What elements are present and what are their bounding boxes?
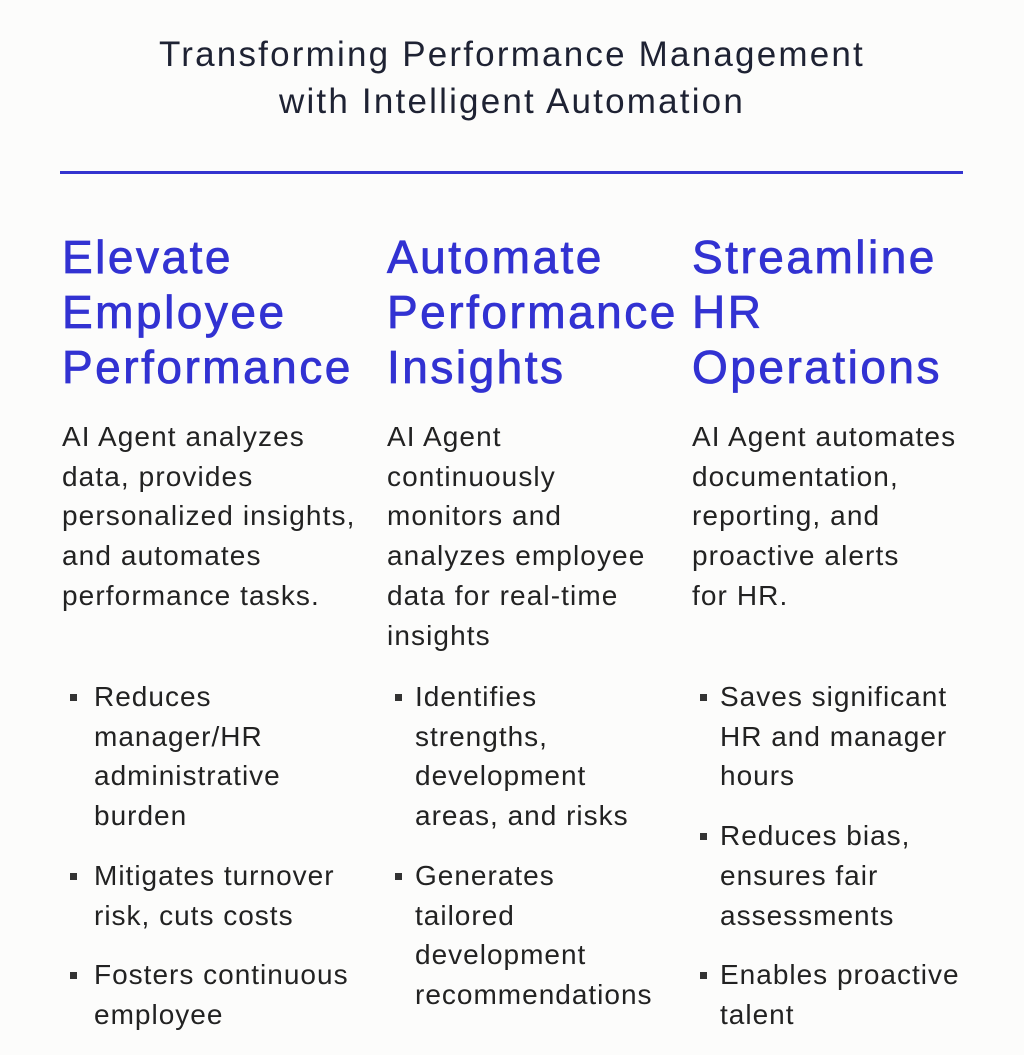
description 3: proactive alerts (692, 540, 899, 571)
bullets 2: development (415, 760, 586, 791)
bullets 2: Generates (415, 860, 555, 891)
bullets 1: administrative (94, 760, 281, 791)
bullets 1: employee (94, 999, 223, 1030)
description 3: documentation, (692, 461, 899, 492)
description 1: personalized insights, (62, 500, 355, 531)
bullets 3: Enables proactive (720, 959, 960, 990)
heading 3: Operations (692, 341, 942, 393)
bullets 2 (395, 681, 653, 1010)
bullets 1: manager/HR (94, 721, 263, 752)
bullets 1: Reduces (94, 681, 212, 712)
heading 2: Performance (387, 286, 678, 338)
bullets 1: risk, cuts costs (94, 900, 294, 931)
bullets 3 (700, 681, 960, 1030)
description 3: for HR. (692, 580, 788, 611)
bullets 2: development (415, 939, 586, 970)
description 2 (387, 421, 645, 651)
bullets 3: HR and manager (720, 721, 947, 752)
heading 1: Performance (62, 341, 353, 393)
description 1: data, provides (62, 461, 253, 492)
heading 2: Automate (387, 231, 604, 283)
description 2: AI Agent (387, 421, 502, 452)
description 2: monitors and (387, 500, 562, 531)
description 1: and automates (62, 540, 262, 571)
description 2: continuously (387, 461, 556, 492)
bullets 2: tailored (415, 900, 515, 931)
description 3: AI Agent automates (692, 421, 956, 452)
bullets 3: assessments (720, 900, 894, 931)
description 3: reporting, and (692, 500, 880, 531)
bullets 3: talent (720, 999, 794, 1030)
bullets 3: ensures fair (720, 860, 878, 891)
bullets 2: areas, and risks (415, 800, 629, 831)
heading 3 (692, 231, 942, 393)
description 1: AI Agent analyzes (62, 421, 305, 452)
title: with Intelligent Automation (279, 82, 745, 121)
column 2 (386, 231, 678, 1010)
description 1 (62, 421, 355, 611)
description 2: analyzes employee (387, 540, 645, 571)
title (159, 35, 865, 121)
column 1 (62, 231, 355, 1030)
description 3 (692, 421, 956, 611)
description 2: data for real-time (387, 580, 618, 611)
column 3 (692, 231, 960, 1030)
description 1: performance tasks. (62, 580, 320, 611)
bullets 1 (70, 681, 349, 1030)
bullets 1: Fosters continuous (94, 959, 349, 990)
bullets 1: burden (94, 800, 187, 831)
heading 3: HR (692, 286, 763, 338)
heading 1 (62, 231, 353, 393)
heading 1: Employee (62, 286, 287, 338)
bullets 3: Saves significant (720, 681, 947, 712)
bullets 2: strengths, (415, 721, 548, 752)
bullets 2: Identifies (415, 681, 537, 712)
bullets 3: hours (720, 760, 795, 791)
heading 3: Streamline (692, 231, 937, 283)
description 2: insights (387, 620, 491, 651)
bullets 3: Reduces bias, (720, 820, 910, 851)
bullets 1: Mitigates turnover (94, 860, 335, 891)
title: Transforming Performance Management (159, 35, 865, 74)
bullets 2: recommendations (415, 979, 653, 1010)
heading 2: Insights (387, 341, 566, 393)
heading 2 (386, 231, 678, 393)
heading 1: Elevate (62, 231, 233, 283)
